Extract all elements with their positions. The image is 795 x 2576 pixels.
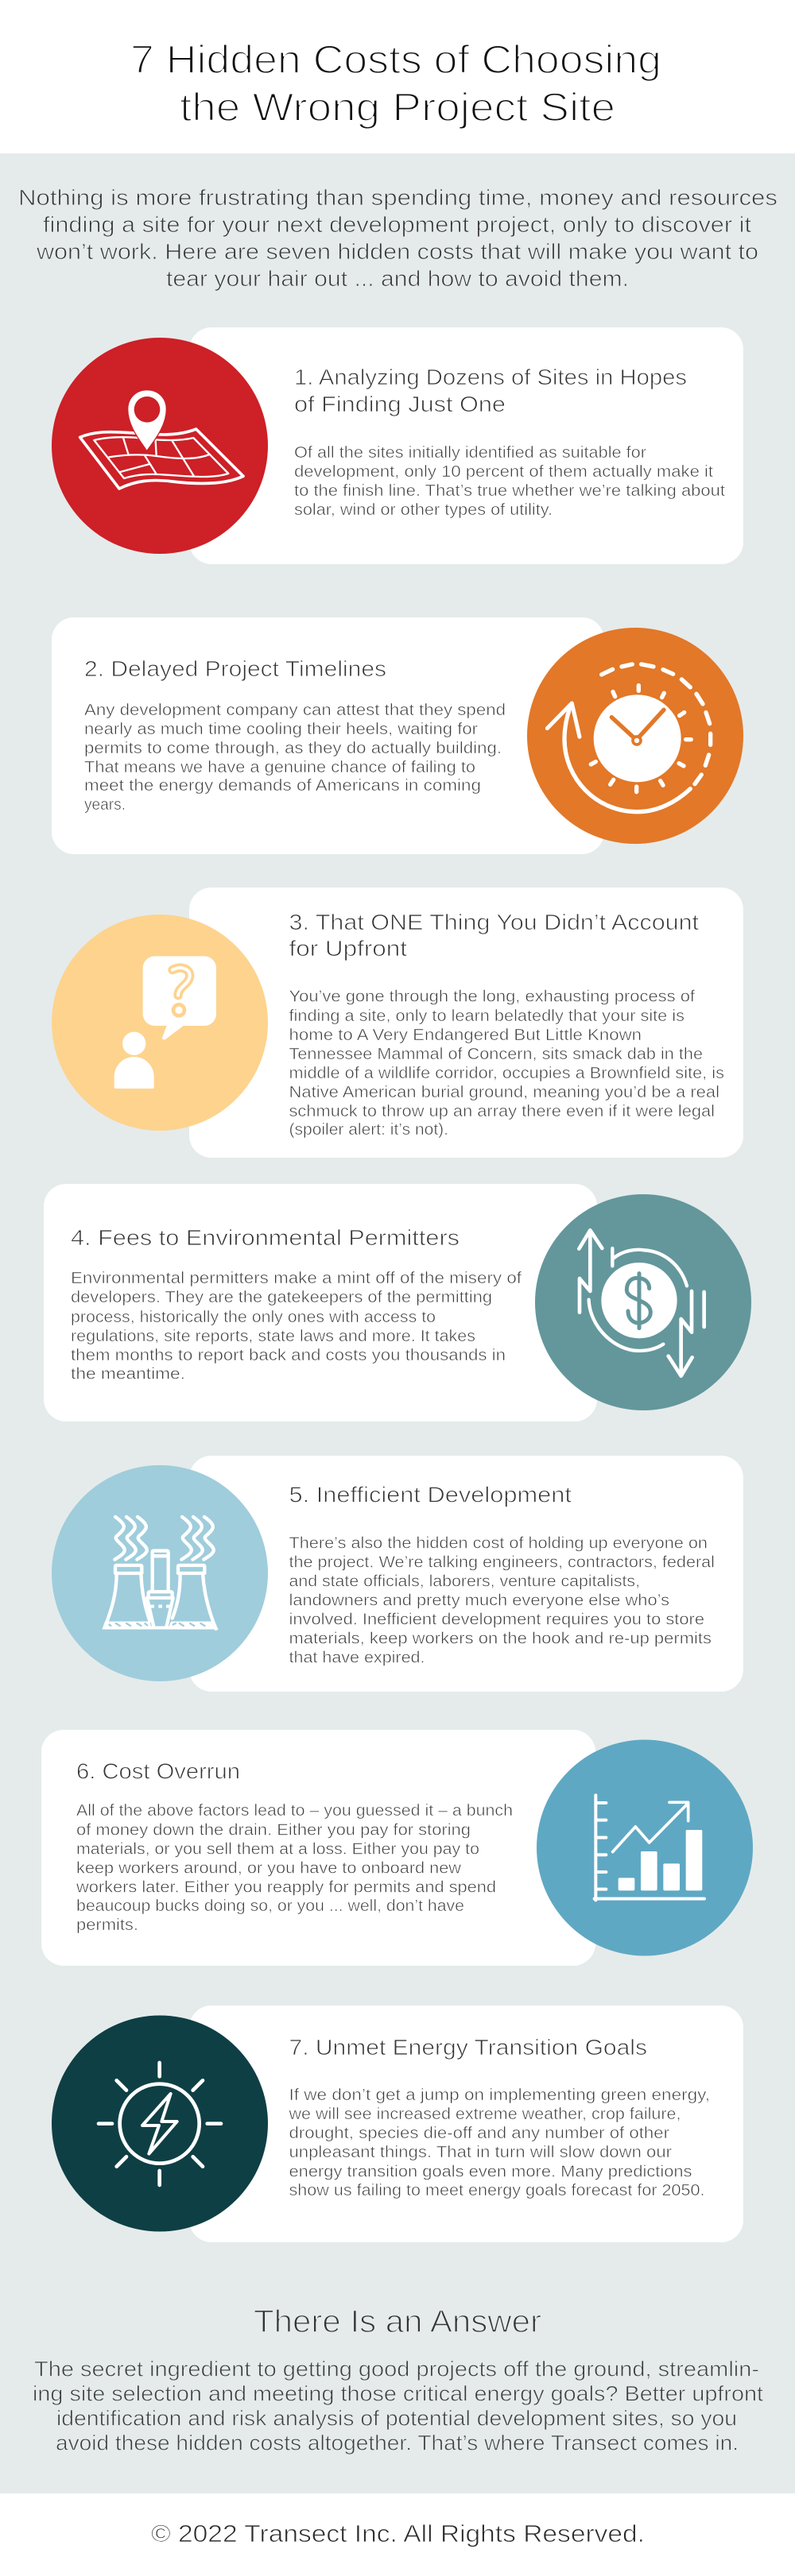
answer text: The secret ingredient to getting good projects off the ground, streamlin- [34,2357,759,2381]
intro text: tear your hair out ... and how to avoid them. [166,266,629,291]
body 7 [288,2087,710,2199]
panel: cost 7 [52,2005,743,2242]
body 4 [71,1270,522,1383]
icon: clock with arrow [527,628,743,844]
body 4: the meantime. [71,1365,185,1383]
heading 1 [294,365,687,416]
heading 7: 7. Unmet Energy Transition Goals [289,2035,647,2060]
body 5: that have expired. [289,1650,425,1667]
body 3: home to A Very Endangered But Little Known [289,1027,642,1044]
body 3: You’ve gone through the long, exhausting process of [289,988,695,1006]
body 7: drought, species die-off and any number of other [289,2125,669,2142]
body 3: finding a site, only to learn belatedly that your site is [289,1008,684,1025]
body 6: keep workers around, or you have to onboard new [76,1859,462,1877]
body 6: of money down the drain. Either you pay for storing [76,1821,471,1839]
panel: cost 1 [52,327,743,564]
body 6: workers later. Either you reapply for permits and spend [76,1878,496,1896]
body 3: schmuck to throw up an array there even if it were legal [289,1103,715,1120]
icon: person with question bubble [52,915,268,1131]
body 4: them months to report back and costs you thousands in [71,1347,506,1364]
card 6 background [41,1730,595,1966]
body 5: involved. Inefficient development requires you to store [289,1611,704,1629]
icon: rising bar chart [537,1740,753,1956]
body 3: Tennessee Mammal of Concern, sits smack dab in the [289,1046,703,1063]
title: 7 Hidden Costs of Choosing [130,37,661,82]
heading 3: for Upfront [289,936,407,961]
card 2 background [52,617,604,854]
body 4: developers. They are the gatekeepers of the permitting [71,1289,492,1306]
icon: power plant [52,1465,268,1681]
card 4 background [44,1184,597,1421]
body 7: unpleasant things. That in turn will slow down our [289,2144,672,2161]
answer text: ing site selection and meeting those critical energy goals? Better upfront [33,2382,764,2406]
footer copyright: © 2022 Transect Inc. All Rights Reserved. [151,2520,645,2547]
card 5 background [189,1456,743,1692]
body 1: solar, wind or other types of utility. [294,501,553,519]
body 2: Any development company can attest that they spend [84,702,506,719]
intro text [18,185,778,291]
heading: There Is an Answer: There Is an Answer [254,2304,541,2339]
panel: cost 6 [41,1730,753,1966]
body 2: meet the energy demands of Americans in coming [84,777,481,795]
body 2: years. [84,796,126,814]
body 7: energy transition goals even more. Many predictions [289,2163,692,2180]
body 2 [84,702,506,814]
body 1 [294,444,725,519]
title: the Wrong Project Site [180,85,615,130]
body 5: landowners and pretty much everyone else who’s [289,1592,669,1610]
body 5: There’s also the hidden cost of holding up everyone on [289,1535,708,1553]
icon: dollar coin with arrows [535,1194,751,1410]
heading 1: of Finding Just One [294,392,506,416]
panel: cost 3 [52,888,743,1158]
body 5: materials, keep workers on the hook and re-up permits [289,1630,712,1648]
body 2: permits to come through, as they do actually building. [84,740,502,757]
body 1: development, only 10 percent of them actually make it [294,463,713,481]
intro text: won’t work. Here are seven hidden costs that will make you want to [36,239,758,264]
body 7: we will see increased extreme weather, crop failure, [288,2106,681,2123]
body 5: the project. We’re talking engineers, contractors, federal [289,1554,715,1572]
title [130,37,661,130]
icon: map with location pin [52,338,268,554]
body 4: regulations, site reports, state laws and more. It takes [71,1328,475,1345]
body 4: Environmental permitters make a mint off of the misery of [71,1270,522,1287]
panel: cost 4 [44,1184,751,1421]
answer text [33,2357,764,2455]
intro text: finding a site for your next development project, only to discover it [43,212,751,237]
card 7 background [189,2005,743,2242]
heading 5: 5. Inefficient Development [289,1483,572,1507]
heading 3: 3. That ONE Thing You Didn’t Account [289,910,699,934]
body 5: and state officials, laborers, venture capitalists, [289,1573,640,1591]
body 7: show us failing to meet energy goals forecast for 2050. [289,2182,704,2199]
body 5 [289,1535,715,1667]
icon: sun with lightning bolt [52,2015,268,2231]
body 6: permits. [76,1917,138,1934]
body 4: process, historically the only ones with access to [71,1309,436,1326]
body 2: nearly as much time cooling their heels, waiting for [84,721,478,738]
body 7: If we don’t get a jump on implementing green energy, [289,2087,710,2104]
panel: cost 5 [52,1456,743,1692]
body 3: (spoiler alert: it’s not). [289,1121,448,1139]
body 1: Of all the sites initially identified as suitable for [294,444,646,462]
heading 1: 1. Analyzing Dozens of Sites in Hopes [294,365,687,389]
card 1 background [189,327,743,564]
body 3: Native American burial ground, meaning you’d be a real [289,1084,719,1101]
body 6: materials, or you sell them at a loss. Either you pay to [76,1840,479,1858]
body 3: middle of a wildlife corridor, occupies a Brownfield site, is [289,1065,724,1082]
body 1: to the finish line. That’s true whether we’re talking about [294,482,725,500]
answer text: avoid these hidden costs altogether. That’s where Transect comes in. [56,2431,739,2455]
heading 6: 6. Cost Overrun [76,1759,240,1783]
body 6: beaucoup bucks doing so, or you ... well, don’t have [76,1897,464,1915]
panel: cost 2 [52,617,743,854]
heading 4: 4. Fees to Environmental Permitters [71,1225,460,1250]
answer text: identification and risk analysis of potential development sites, so you [56,2406,737,2430]
body 3 [289,988,724,1139]
card 3 background [189,888,743,1158]
body 6 [76,1802,513,1934]
body 6: All of the above factors lead to – you guessed it – a bunch [76,1802,513,1820]
body 2: That means we have a genuine chance of failing to [84,759,475,776]
heading 3 [289,910,699,961]
heading 2: 2. Delayed Project Timelines [84,656,386,681]
intro text: Nothing is more frustrating than spending time, money and resources [18,185,778,210]
